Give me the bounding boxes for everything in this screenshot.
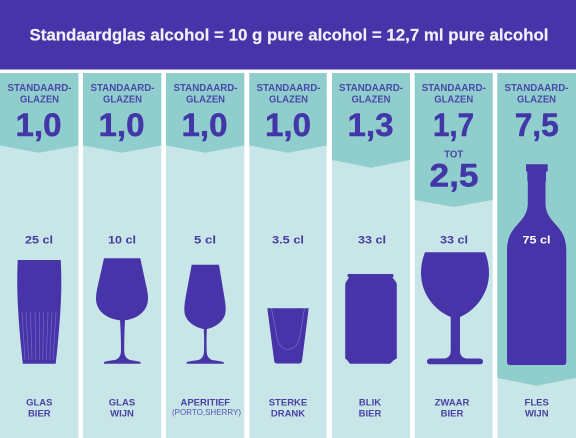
panel: glas wijn: STANDAARD-: [90, 83, 154, 94]
panel: glas bier: [0, 73, 78, 438]
panel: sterke drank: DRANK: [271, 409, 305, 420]
panel: glas bier: 1,0: [16, 107, 62, 143]
panel: sterke drank: GLAZEN: [269, 94, 308, 105]
panel: zwaar bier: STANDAARD-: [422, 83, 486, 94]
panel: glas bier: STANDAARD-: [8, 83, 72, 94]
panel: zwaar bier: [415, 73, 493, 438]
panel: blik bier: BIER: [359, 409, 381, 420]
panel: zwaar bier: 33 cl: [440, 234, 468, 246]
panel: blik bier: 33 cl: [358, 234, 386, 246]
panel: blik bier: 1,3: [348, 107, 394, 143]
panel: fles wijn: [497, 73, 576, 438]
panel: fles wijn: 75 cl: [522, 234, 550, 246]
panel: zwaar bier: 1,7: [433, 107, 474, 143]
panel: glas wijn: WIJN: [110, 409, 134, 420]
panel: aperitief: GLAZEN: [186, 94, 225, 105]
panel: blik bier: BLIK: [359, 397, 381, 408]
panel: glas wijn: GLAS: [109, 397, 135, 408]
header banner: [0, 0, 576, 70]
panel: fles wijn: FLES: [525, 397, 549, 408]
panel: fles wijn: GLAZEN: [517, 94, 556, 105]
panel: zwaar bier: GLAZEN: [434, 94, 473, 105]
panel: glas bier: GLAS: [26, 397, 52, 408]
panel: glas bier: GLAZEN: [20, 94, 59, 105]
panel: sterke drank: 1,0: [265, 107, 311, 143]
panel: aperitief: (PORTO,SHERRY): [172, 407, 241, 417]
panel: aperitief: 5 cl: [194, 234, 216, 246]
panel: glas wijn: GLAZEN: [103, 94, 142, 105]
panel: fles wijn: 7,5: [515, 107, 559, 143]
panel: aperitief: [166, 73, 244, 438]
panel: aperitief: STANDAARD-: [174, 83, 238, 94]
panel: glas bier: 25 cl: [25, 234, 53, 246]
panel: sterke drank: 3.5 cl: [272, 234, 304, 246]
panel: sterke drank: STERKE: [269, 397, 307, 408]
title: Standaardglas alcohol = 10 g pure alcohol = 12,7 ml pure alcohol: [30, 26, 548, 44]
panel: zwaar bier: TOT: [444, 149, 463, 160]
icon: wine bottle: [507, 164, 566, 365]
panel: fles wijn: WIJN: [525, 409, 549, 420]
panel: zwaar bier: 2,5: [430, 158, 478, 194]
panel: zwaar bier: BIER: [441, 409, 463, 420]
panel: glas wijn: 1,0: [98, 107, 144, 143]
icon: wine glass: [96, 258, 148, 364]
panel: glas bier: BIER: [28, 409, 51, 420]
icon: aperitif glass: [184, 265, 226, 364]
panel: blik bier: [332, 73, 410, 438]
icon: beer goblet: [421, 252, 489, 364]
panel: glas wijn: [83, 73, 161, 438]
panel: glas wijn: 10 cl: [108, 234, 136, 246]
panel: aperitief: 1,0: [182, 107, 228, 143]
icon: shot glass: [267, 308, 309, 364]
panel: aperitief: APERITIEF: [180, 397, 230, 408]
panel: blik bier: STANDAARD-: [339, 83, 403, 94]
panel: fles wijn: STANDAARD-: [504, 83, 568, 94]
icon: beer can: [345, 274, 397, 364]
icon: beer glass: [17, 260, 61, 364]
panel: sterke drank: [249, 73, 327, 438]
panel: sterke drank: STANDAARD-: [256, 83, 320, 94]
panel: blik bier: GLAZEN: [352, 94, 390, 105]
panel: zwaar bier: ZWAAR: [435, 397, 470, 408]
